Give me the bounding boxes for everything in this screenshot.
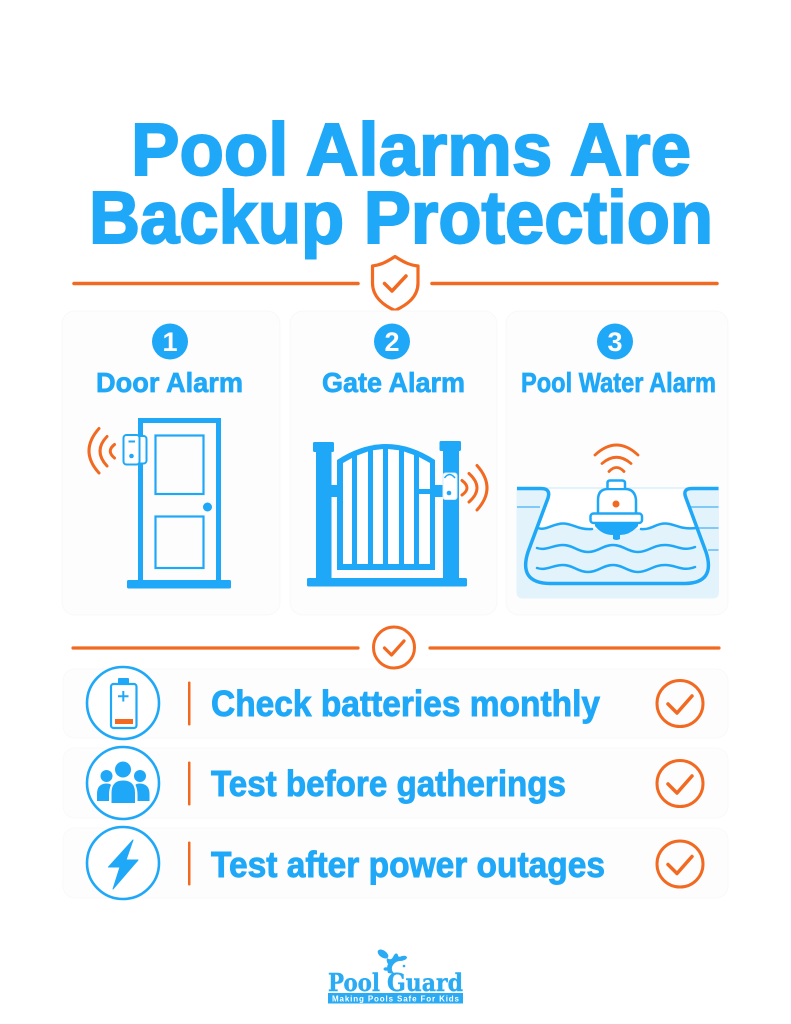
panel: door alarm [62, 311, 280, 615]
panel: gate alarm [290, 311, 497, 615]
divider with check icon [73, 627, 719, 668]
text: test before gatherings: Test before gatherings [211, 763, 566, 804]
icon: gate signal waves [462, 466, 487, 510]
icon: lightning bolt [87, 827, 159, 899]
icon: door [127, 420, 231, 588]
logo wordmark: Guard [387, 968, 463, 997]
icon: check [657, 841, 703, 887]
icon: floating pool alarm [590, 480, 642, 540]
logo tagline: Making Pools Safe For Kids [332, 994, 460, 1004]
divider with shield icon [74, 256, 717, 310]
heading: pool water alarm: Pool Water Alarm [521, 367, 716, 398]
icon: people [87, 747, 159, 819]
number badge 1: 1 [162, 327, 178, 357]
text: test after power outages: Test after power outages [211, 844, 605, 885]
number badge 2: 2 [384, 327, 400, 357]
number badge 3: 3 [607, 327, 623, 357]
title: Backup Protection [89, 176, 713, 259]
title: Pool Alarms Are [131, 108, 691, 191]
icon: gate [307, 441, 467, 586]
icon: check [657, 680, 703, 726]
icon: door signal waves [89, 428, 114, 473]
row: check batteries monthly [63, 667, 728, 739]
title [89, 108, 713, 259]
row: test after power outages [63, 827, 728, 899]
text: check batteries monthly: Check batteries monthly [211, 683, 601, 724]
row: test before gatherings [63, 747, 728, 819]
icon: check [657, 760, 703, 806]
number badge 2 [374, 324, 410, 360]
separator [188, 762, 190, 806]
logo: pool guard [328, 948, 463, 1004]
logo wordmark: Pool [328, 968, 380, 997]
separator [188, 842, 190, 886]
icon: pool signal waves [595, 445, 638, 472]
illustration: pool [516, 487, 719, 598]
icon: gate latch sensor [443, 473, 457, 500]
icon: door sensor [124, 435, 146, 464]
icon: battery [87, 667, 159, 739]
logo splash [376, 948, 407, 974]
panel: pool water alarm [506, 311, 728, 615]
logo wordmark [328, 968, 463, 997]
separator [188, 682, 190, 726]
number badge 3 [597, 324, 633, 360]
heading: door alarm: Door Alarm [96, 367, 243, 398]
heading: gate alarm: Gate Alarm [322, 367, 465, 398]
number badge 1 [152, 324, 188, 360]
